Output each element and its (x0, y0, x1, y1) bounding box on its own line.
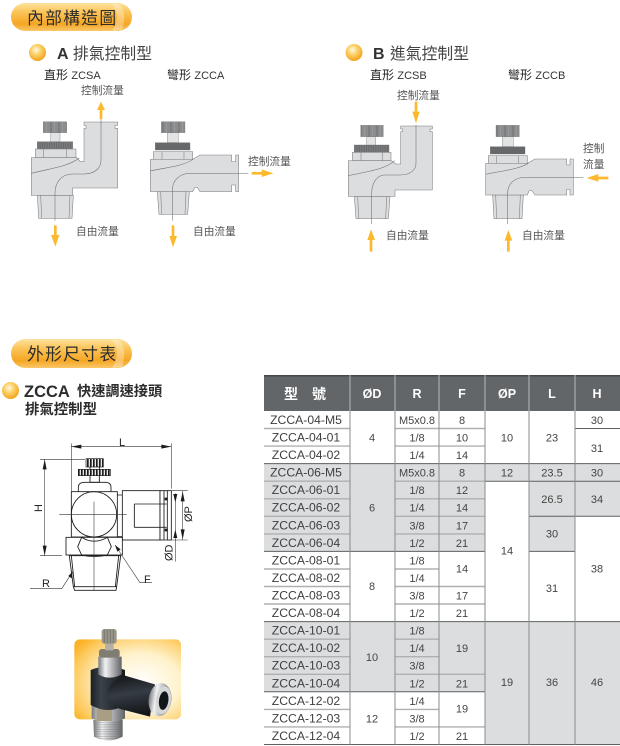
column: model: ZCCA-04-01 (272, 430, 340, 444)
label: elbow ZCCB: 彎形 ZCCB (508, 67, 565, 82)
column: F: 21 (456, 538, 468, 550)
column: R: M5x0.8 (399, 415, 435, 427)
column: R: 3/8 (409, 661, 425, 673)
column: model: ZCCA-10-01 (272, 624, 340, 638)
flow labels: 自由流量 (386, 229, 429, 242)
column: F: 17 (456, 520, 468, 532)
heading: ZCCA product title: 排氣控制型 (25, 400, 97, 418)
column: F: 10 (456, 432, 468, 444)
column: OD: 10 (366, 652, 378, 664)
column: L: 36 (546, 677, 558, 689)
column: R: 1/4 (409, 450, 425, 462)
column: R: 1/2 (409, 608, 425, 620)
label: elbow ZCCA: 彎形 ZCCA (167, 67, 225, 82)
dimension letters: ØP (183, 506, 195, 522)
column: OP: 14 (501, 546, 513, 558)
column: model: ZCCA-10-02 (272, 641, 340, 655)
section heading: dimensions (11, 339, 132, 368)
column: H (591, 415, 603, 689)
flow labels: 控制流量 (81, 84, 124, 97)
heading: ZCCA product title (2, 382, 163, 418)
column: OD: 12 (366, 713, 378, 725)
column: model: ZCCA-12-02 (272, 694, 340, 708)
column: R: 1/2 (409, 538, 425, 550)
table header: ØP (498, 387, 516, 401)
column: L: 23.5 (541, 468, 563, 480)
hex nut and thread (66, 537, 122, 590)
flow labels: 自由流量 (76, 225, 119, 238)
column: H: 30 (591, 468, 603, 480)
label: straight ZCSA: 直形 ZCSA (44, 68, 101, 82)
diagram: ZCCB elbow fitting (486, 125, 608, 252)
table header: 號 (312, 386, 326, 402)
column: R: M5x0.8 (399, 468, 435, 480)
heading: B intake control: 進氣控制型 (390, 45, 469, 63)
column: model: ZCCA-06-01 (272, 483, 340, 497)
column: L: 26.5 (541, 494, 563, 506)
table header: ØD (363, 387, 381, 401)
column: R: 3/8 (409, 520, 425, 532)
column: F: 14 (456, 503, 468, 515)
label: straight ZCSB: 直形 ZCSB (370, 68, 427, 82)
column: R: 3/8 (409, 590, 425, 602)
column: L (541, 432, 563, 689)
column: model: ZCCA-06-02 (272, 501, 340, 515)
column: R: 1/4 (409, 573, 425, 585)
column: R: 1/4 (409, 503, 425, 515)
flow labels (76, 84, 605, 242)
column: model: ZCCA-08-01 (272, 553, 340, 567)
diagram: ZCSA straight fitting (31, 102, 118, 247)
grey bands (264, 464, 620, 744)
dimension letters: F (144, 574, 151, 586)
dimension letters (33, 437, 195, 590)
dimension letters: ØD (164, 544, 176, 561)
column: OD (366, 432, 378, 725)
column: R: 3/8 (409, 713, 425, 725)
column: L: 31 (546, 583, 558, 595)
column: H: 38 (591, 564, 603, 576)
column: R: 1/8 (409, 555, 425, 567)
column: H: 31 (591, 443, 603, 455)
column: model: ZCCA-10-03 (272, 659, 340, 673)
dimension letters: L (119, 437, 125, 449)
heading: ZCCA product title: ZCCA (24, 383, 70, 401)
flow labels: 流量 (583, 158, 605, 171)
column: F: 12 (456, 485, 468, 497)
column: L: 30 (546, 528, 558, 540)
column: R: 1/8 (409, 485, 425, 497)
dimension table (264, 375, 620, 744)
column: model: ZCCA-06-03 (272, 518, 340, 532)
column: R: 1/8 (409, 626, 425, 638)
heading: B intake control: B (373, 46, 385, 63)
dimension lines (30, 443, 188, 590)
dimension letters: R (42, 578, 50, 590)
heading: A exhaust control (29, 44, 152, 63)
group separators (264, 411, 620, 744)
column: OP (501, 432, 513, 689)
column: F: 19 (456, 643, 468, 655)
section heading: dimensions: 外形尺寸表 (27, 345, 117, 364)
table header: H (592, 387, 602, 401)
column: F: 21 (456, 608, 468, 620)
row lines (264, 428, 485, 727)
column: F: 8 (459, 415, 465, 427)
column: F: 19 (456, 704, 468, 716)
column: OP: 12 (501, 468, 513, 480)
column: OD: 8 (369, 581, 375, 593)
body (71, 491, 171, 540)
column: F: 17 (456, 590, 468, 602)
heading: B intake control (346, 44, 469, 63)
dimension letters: H (33, 504, 45, 512)
column: F: 14 (456, 450, 468, 462)
column: model: ZCCA-10-04 (272, 676, 340, 690)
dimension drawing (30, 443, 188, 590)
table header: L (548, 387, 556, 401)
section heading: internal structure: 內部構造圖 (27, 9, 117, 28)
flow labels: 自由流量 (522, 229, 565, 242)
column: OP: 19 (501, 677, 513, 689)
section heading: internal structure (11, 3, 132, 31)
table header: F (458, 387, 466, 401)
column: model: ZCCA-08-04 (272, 606, 340, 620)
column: model: ZCCA-04-M5 (270, 413, 342, 427)
column: model: ZCCA-08-02 (272, 571, 340, 585)
column: model: ZCCA-12-04 (272, 729, 340, 743)
column: H: 30 (591, 415, 603, 427)
column: R: 1/2 (409, 731, 425, 743)
column: L: 23 (546, 432, 558, 444)
column: R: 1/4 (409, 696, 425, 708)
column: F: 14 (456, 564, 468, 576)
column: model: ZCCA-06-04 (272, 536, 340, 550)
column: OD: 6 (369, 503, 375, 515)
column: model: ZCCA-12-03 (272, 711, 340, 725)
heading: A exhaust control: 排氣控制型 (73, 45, 152, 63)
flow labels: 控制流量 (397, 89, 440, 102)
heading: ZCCA product title: 快速調速接頭 (77, 383, 163, 400)
heading: A exhaust control: A (57, 46, 69, 63)
column: R (399, 415, 435, 743)
diagram: ZCCA elbow fitting (150, 122, 273, 247)
fitting (91, 629, 174, 740)
column: H: 46 (591, 677, 603, 689)
flow labels: 自由流量 (193, 225, 236, 238)
column: OD: 4 (369, 432, 375, 444)
product photo (74, 629, 181, 740)
column: model: ZCCA-08-03 (272, 588, 340, 602)
flow labels: 控制 (583, 142, 604, 155)
column: OP: 10 (501, 432, 513, 444)
orange backdrop (74, 639, 181, 719)
column: F (456, 415, 468, 743)
column: model: ZCCA-04-02 (272, 448, 340, 462)
column: F: 8 (459, 468, 465, 480)
table header (264, 375, 620, 411)
column: model (270, 413, 342, 743)
column: H: 34 (591, 494, 603, 506)
column: R: 1/8 (409, 432, 425, 444)
column: R: 1/4 (409, 643, 425, 655)
column: model: ZCCA-06-M5 (270, 466, 342, 480)
diagram: ZCSB straight fitting (348, 102, 432, 252)
column: F: 21 (456, 731, 468, 743)
column: F: 21 (456, 678, 468, 690)
knob and nut (78, 459, 111, 491)
column: R: 1/2 (409, 678, 425, 690)
table header: R (412, 387, 422, 401)
table header: 型 (284, 386, 298, 402)
flow labels: 控制流量 (248, 155, 291, 168)
